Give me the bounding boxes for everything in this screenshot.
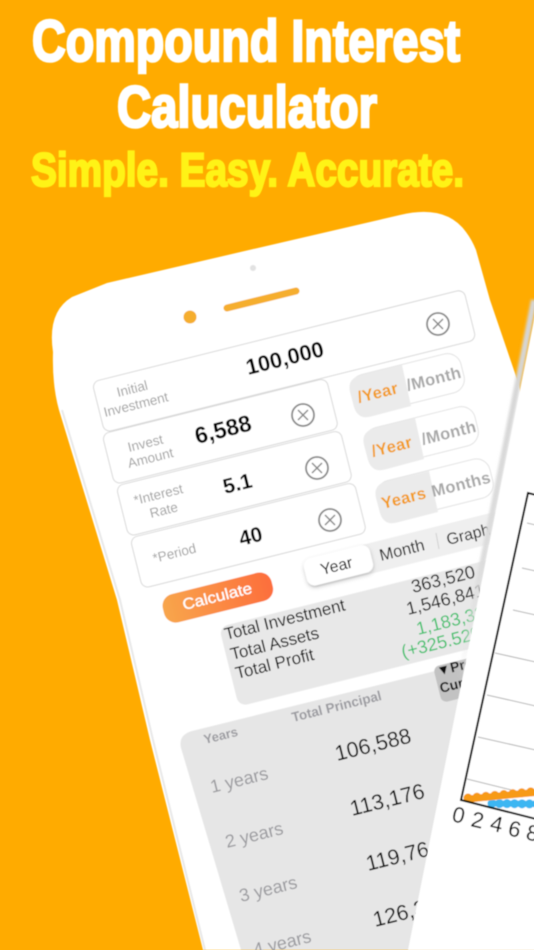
line chart xyxy=(450,493,534,847)
axis labels: 6 xyxy=(506,816,523,843)
input: period xyxy=(130,482,367,588)
results panel: 363,520 xyxy=(409,562,477,597)
input: invest amount: Invest xyxy=(126,432,165,455)
input: period: 40 xyxy=(237,523,265,551)
input: invest amount xyxy=(102,378,339,484)
toggle: years or months: Months xyxy=(430,469,493,501)
table panel: Total Principal xyxy=(290,688,383,725)
axis labels: 2 xyxy=(469,807,486,834)
tabs: year month graph: Month xyxy=(378,536,426,565)
results panel: 1,183,321 xyxy=(414,600,497,639)
input: invest amount: Amount xyxy=(126,445,175,471)
second phone body xyxy=(408,300,534,950)
phone: calculator screen xyxy=(52,212,534,950)
input: initial investment: Investment xyxy=(102,389,170,420)
second phone edge shadow xyxy=(460,300,534,680)
toggle: year or month 1 xyxy=(348,351,467,417)
table panel: 113,176 xyxy=(347,779,427,821)
toggle: year or month 1: /Year xyxy=(356,379,400,407)
title xyxy=(31,9,464,196)
phone: graph screen xyxy=(408,300,534,950)
toggle: year or month 2 xyxy=(362,404,481,470)
calculate button: Calculate xyxy=(181,580,254,614)
axis labels: 0 xyxy=(450,802,467,829)
toggle: year or month 2: /Year xyxy=(370,433,414,461)
results panel: Total Investment xyxy=(222,595,347,644)
axis labels xyxy=(450,802,534,847)
phone edge highlight xyxy=(62,410,205,950)
phone body xyxy=(52,212,534,950)
results panel: Total Assets xyxy=(228,623,321,664)
results panel xyxy=(219,550,534,707)
input: interest rate: Rate xyxy=(148,499,179,521)
input: initial investment: Initial xyxy=(115,378,149,400)
input: invest amount: 6,588 xyxy=(192,410,254,449)
input: interest rate: 5.1 xyxy=(221,469,255,499)
input: initial investment: 100,000 xyxy=(243,336,326,380)
table panel xyxy=(180,650,534,950)
input: initial investment xyxy=(92,289,476,432)
axis labels: 4 xyxy=(488,811,505,838)
calculate button xyxy=(160,570,276,625)
tabs: year month graph xyxy=(302,502,534,589)
series: total assets xyxy=(468,791,534,798)
toggle: year or month 1: /Month xyxy=(405,364,463,395)
table panel: 119,764 xyxy=(363,834,443,876)
table panel: Years xyxy=(202,724,239,747)
progress button: Current xyxy=(438,668,491,696)
toggle: year or month 2: /Month xyxy=(420,418,478,449)
toggle: years or months: Years xyxy=(380,484,428,513)
results panel: (+325.52%) xyxy=(399,620,495,662)
results panel: 1,546,841 xyxy=(404,580,487,619)
progress button: ▼Progress xyxy=(435,645,511,679)
camera dot xyxy=(250,265,256,271)
table panel: 2 years xyxy=(223,818,285,852)
input: interest rate xyxy=(116,430,353,536)
table panel: 126,352 xyxy=(370,890,452,932)
series: principal xyxy=(492,799,534,808)
tabs: year month graph: Year xyxy=(319,554,355,579)
toggle: years or months xyxy=(374,456,496,523)
chart axes xyxy=(461,493,534,820)
title: Caluculator xyxy=(117,75,377,140)
tabs: year month graph: Graph xyxy=(445,522,492,549)
table panel: 3 years xyxy=(237,872,299,906)
progress button xyxy=(433,645,511,703)
results panel: Total Profit xyxy=(233,645,316,683)
table panel: 106,588 xyxy=(332,724,414,766)
input: period: *Period xyxy=(151,541,198,566)
input: interest rate: *Interest xyxy=(132,481,185,508)
speaker notch xyxy=(184,291,296,324)
table panel: 1 years xyxy=(208,763,270,797)
